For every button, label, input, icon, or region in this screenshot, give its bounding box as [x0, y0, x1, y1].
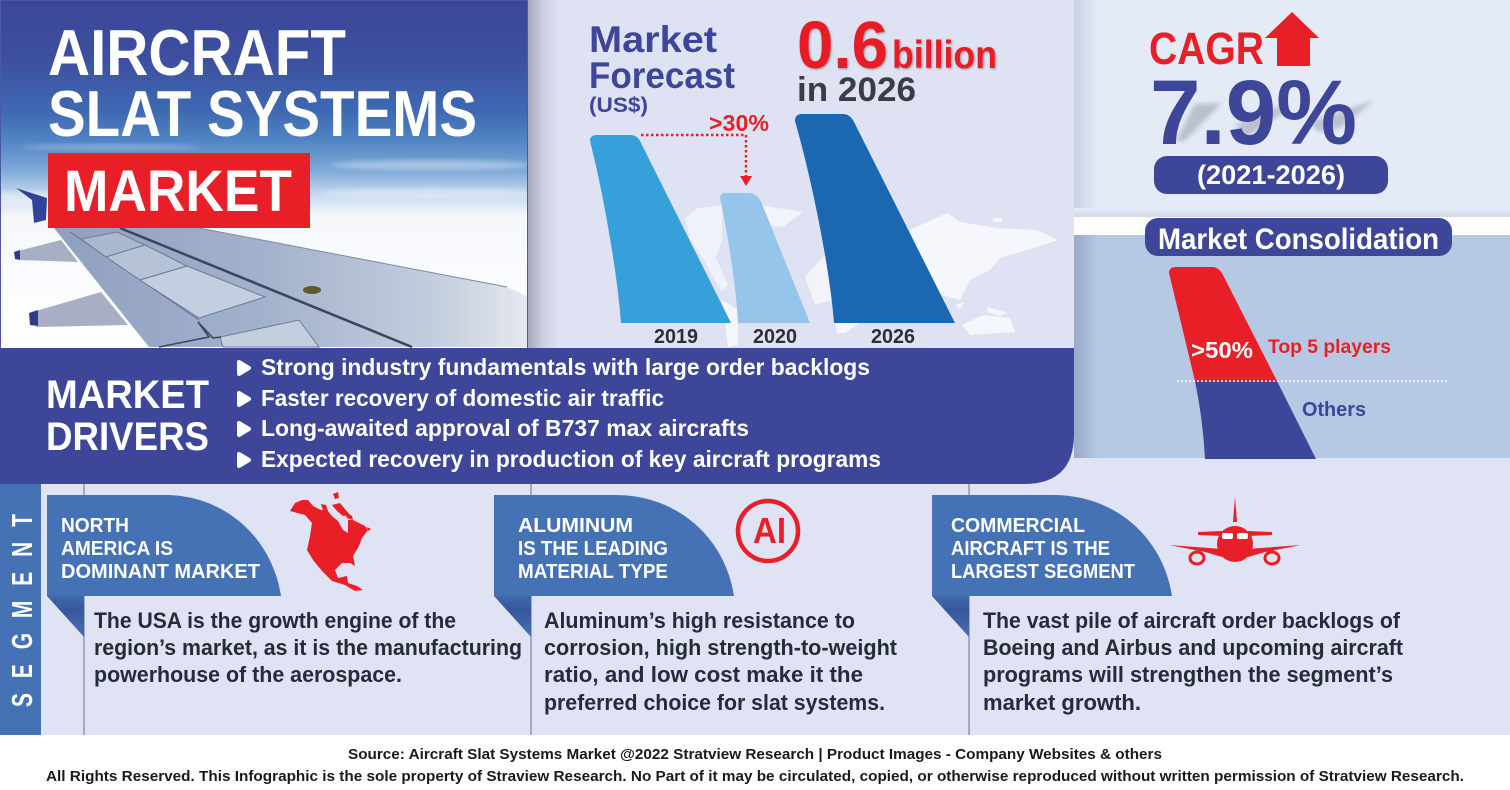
icon: up arrow [1265, 12, 1319, 66]
card header [47, 495, 281, 596]
year labels [654, 326, 915, 348]
icon: aluminum symbol: AI [753, 510, 786, 551]
body text: corrosion, high strength-to-weight [544, 635, 898, 660]
header text: COMMERCIAL [951, 514, 1085, 537]
drivers heading: DRIVERS [46, 415, 209, 459]
header text: ALUMINUM [518, 514, 633, 537]
ribbon fold [47, 596, 84, 637]
forecast heading: Market [589, 19, 717, 60]
body text: Boeing and Airbus and upcoming aircraft [983, 635, 1404, 660]
card header [494, 495, 734, 596]
driver 1: Strong industry fundamentals with large order backlogs [261, 354, 870, 380]
body text: The vast pile of aircraft order backlogs of [983, 608, 1401, 633]
driver 2: Faster recovery of domestic air traffic [261, 385, 664, 411]
tail share: others [1195, 381, 1316, 459]
body text: Aluminum’s high resistance to [544, 608, 855, 633]
segment card: material [494, 484, 898, 735]
bar 2020 [720, 193, 810, 323]
bar 2019 [590, 135, 731, 323]
drivers heading: MARKET [46, 373, 209, 417]
year labels: 2026 [871, 326, 915, 348]
title: AIRCRAFT [48, 16, 346, 89]
driver 4: Expected recovery in production of key aircraft programs [261, 446, 881, 472]
aircraft wing [14, 188, 527, 347]
CAGR value: 7.9% [1150, 62, 1357, 164]
body text [94, 608, 522, 687]
top 5 label: Top 5 players [1268, 337, 1391, 358]
body text: powerhouse of the aerospace. [94, 662, 402, 687]
footer [0, 735, 1510, 790]
consolidation heading pill: Market Consolidation [1158, 223, 1439, 256]
bar 2026 [795, 114, 955, 323]
header text [518, 514, 668, 583]
year labels: 2019 [654, 326, 698, 348]
forecast heading: Forecast [589, 55, 735, 96]
body text: region’s market, as it is the manufacturing [94, 635, 522, 660]
panel: segment [0, 484, 1404, 735]
icon: airplane [1169, 497, 1301, 564]
ribbon fold [494, 596, 531, 637]
panel: market drivers [0, 348, 1074, 484]
tail share: top 5 players [1169, 267, 1277, 381]
world map [685, 205, 1058, 347]
header text: IS THE LEADING [518, 537, 668, 560]
others label: Others [1302, 399, 1366, 421]
forecast value: billion [892, 34, 997, 77]
title: SLAT SYSTEMS [48, 77, 477, 150]
body text: market growth. [983, 690, 1141, 715]
rights line: All Rights Reserved. This Infographic is the sole property of Straview Research. No Part of it may be circulated, copied, or otherwise reproduced without written permission of Stratview Research. [46, 768, 1464, 785]
drop callout arrow: >30% [709, 110, 769, 136]
body text: preferred choice for slat systems. [544, 690, 885, 715]
panel: market consolidation [1074, 217, 1510, 459]
card rule [968, 484, 970, 735]
body text [544, 608, 898, 715]
panel background [1074, 0, 1510, 217]
period pill [1154, 156, 1388, 194]
panel background [528, 0, 1074, 348]
header text: NORTH [61, 514, 129, 537]
header text [951, 514, 1135, 583]
icon: aluminum symbol [738, 501, 798, 561]
card rule [530, 484, 532, 735]
body text: The USA is the growth engine of the [94, 608, 456, 633]
drop callout arrow [641, 110, 769, 186]
year labels: 2020 [753, 326, 797, 348]
header text: MATERIAL TYPE [518, 560, 668, 583]
period pill: (2021-2026) [1197, 160, 1345, 190]
forecast heading [589, 19, 735, 117]
body text: ratio, and low cost make it the [544, 662, 863, 687]
share value: >50% [1191, 337, 1253, 363]
panel: CAGR [1074, 0, 1510, 217]
body text: programs will strengthen the segment’s [983, 662, 1393, 687]
icon: north america map [290, 492, 371, 591]
band [0, 348, 1074, 484]
segment side tab: SEGMENT [7, 514, 39, 707]
body text [983, 608, 1404, 715]
segment side tab [0, 484, 41, 735]
header text: DOMINANT MARKET [61, 560, 260, 583]
header text: AIRCRAFT IS THE [951, 537, 1110, 560]
header text: AMERICA IS [61, 537, 173, 560]
number shadow [1176, 100, 1375, 141]
ribbon fold [932, 596, 969, 637]
forecast heading: (US$) [589, 94, 648, 117]
forecast value: 0.6 [797, 8, 888, 83]
forecast value [797, 8, 997, 109]
header text [61, 514, 260, 583]
panel: hero photo with title [0, 0, 540, 348]
title [48, 16, 477, 150]
CAGR label: CAGR [1149, 23, 1264, 74]
divider [1177, 380, 1449, 382]
card header [932, 495, 1172, 596]
driver 3: Long-awaited approval of B737 max aircrafts [261, 415, 749, 441]
driver list [239, 354, 881, 472]
sky photo background [0, 0, 540, 348]
header text: LARGEST SEGMENT [951, 560, 1135, 583]
forecast value: in 2026 [797, 71, 916, 109]
segment card: aircraft type [932, 484, 1404, 735]
card rule [83, 484, 85, 735]
market label: MARKET [64, 159, 292, 224]
panel: market forecast [528, 0, 1074, 348]
segment card: region [47, 484, 522, 735]
drivers heading [46, 373, 209, 459]
source line: Source: Aircraft Slat Systems Market @2022 Stratview Research | Product Images - Company Websites & others [348, 746, 1162, 763]
panel background [1074, 217, 1510, 458]
